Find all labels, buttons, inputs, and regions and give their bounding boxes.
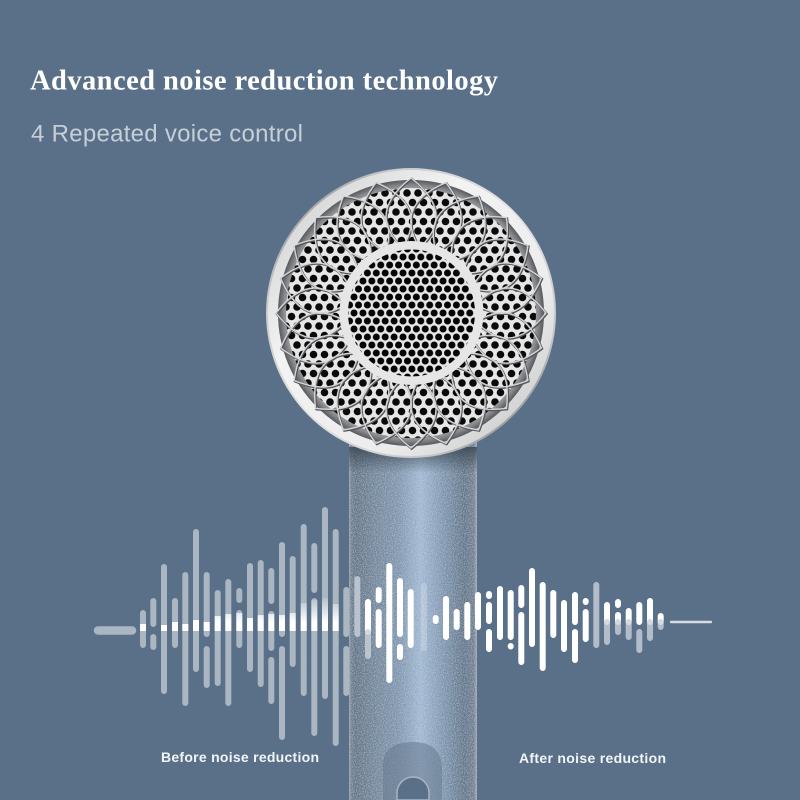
- white overlap of bars: [143, 598, 336, 631]
- petals shadow: [275, 177, 549, 451]
- recessed ring: [278, 180, 544, 446]
- handle collar shadow: [349, 447, 477, 473]
- outer rim: [266, 168, 556, 458]
- title: Advanced noise reduction technology: [30, 66, 498, 96]
- right tail line: [671, 621, 711, 623]
- label: after noise reduction: After noise reduction: [519, 750, 666, 766]
- left lead-in dash: [98, 626, 132, 635]
- faint bar on handle: [421, 586, 427, 648]
- handle slot: [397, 777, 429, 800]
- handle recess: [383, 742, 442, 800]
- centre plate: [340, 241, 484, 385]
- before bars on handle: [354, 579, 360, 634]
- translucent lower bars: [368, 585, 661, 656]
- hair dryer handle: [349, 440, 477, 800]
- subtitle: 4 Repeated voice control: [31, 121, 303, 148]
- label: before noise reduction: Before noise reduction: [161, 749, 319, 765]
- outer mesh: [286, 188, 536, 438]
- petals highlight: [274, 176, 548, 450]
- centre mesh: [348, 250, 475, 376]
- waveform: after noise reduction: [368, 566, 711, 680]
- waveform: before noise reduction: [98, 510, 357, 743]
- before bars: [143, 510, 346, 743]
- hair dryer head: [266, 168, 556, 458]
- after bars: [368, 566, 661, 680]
